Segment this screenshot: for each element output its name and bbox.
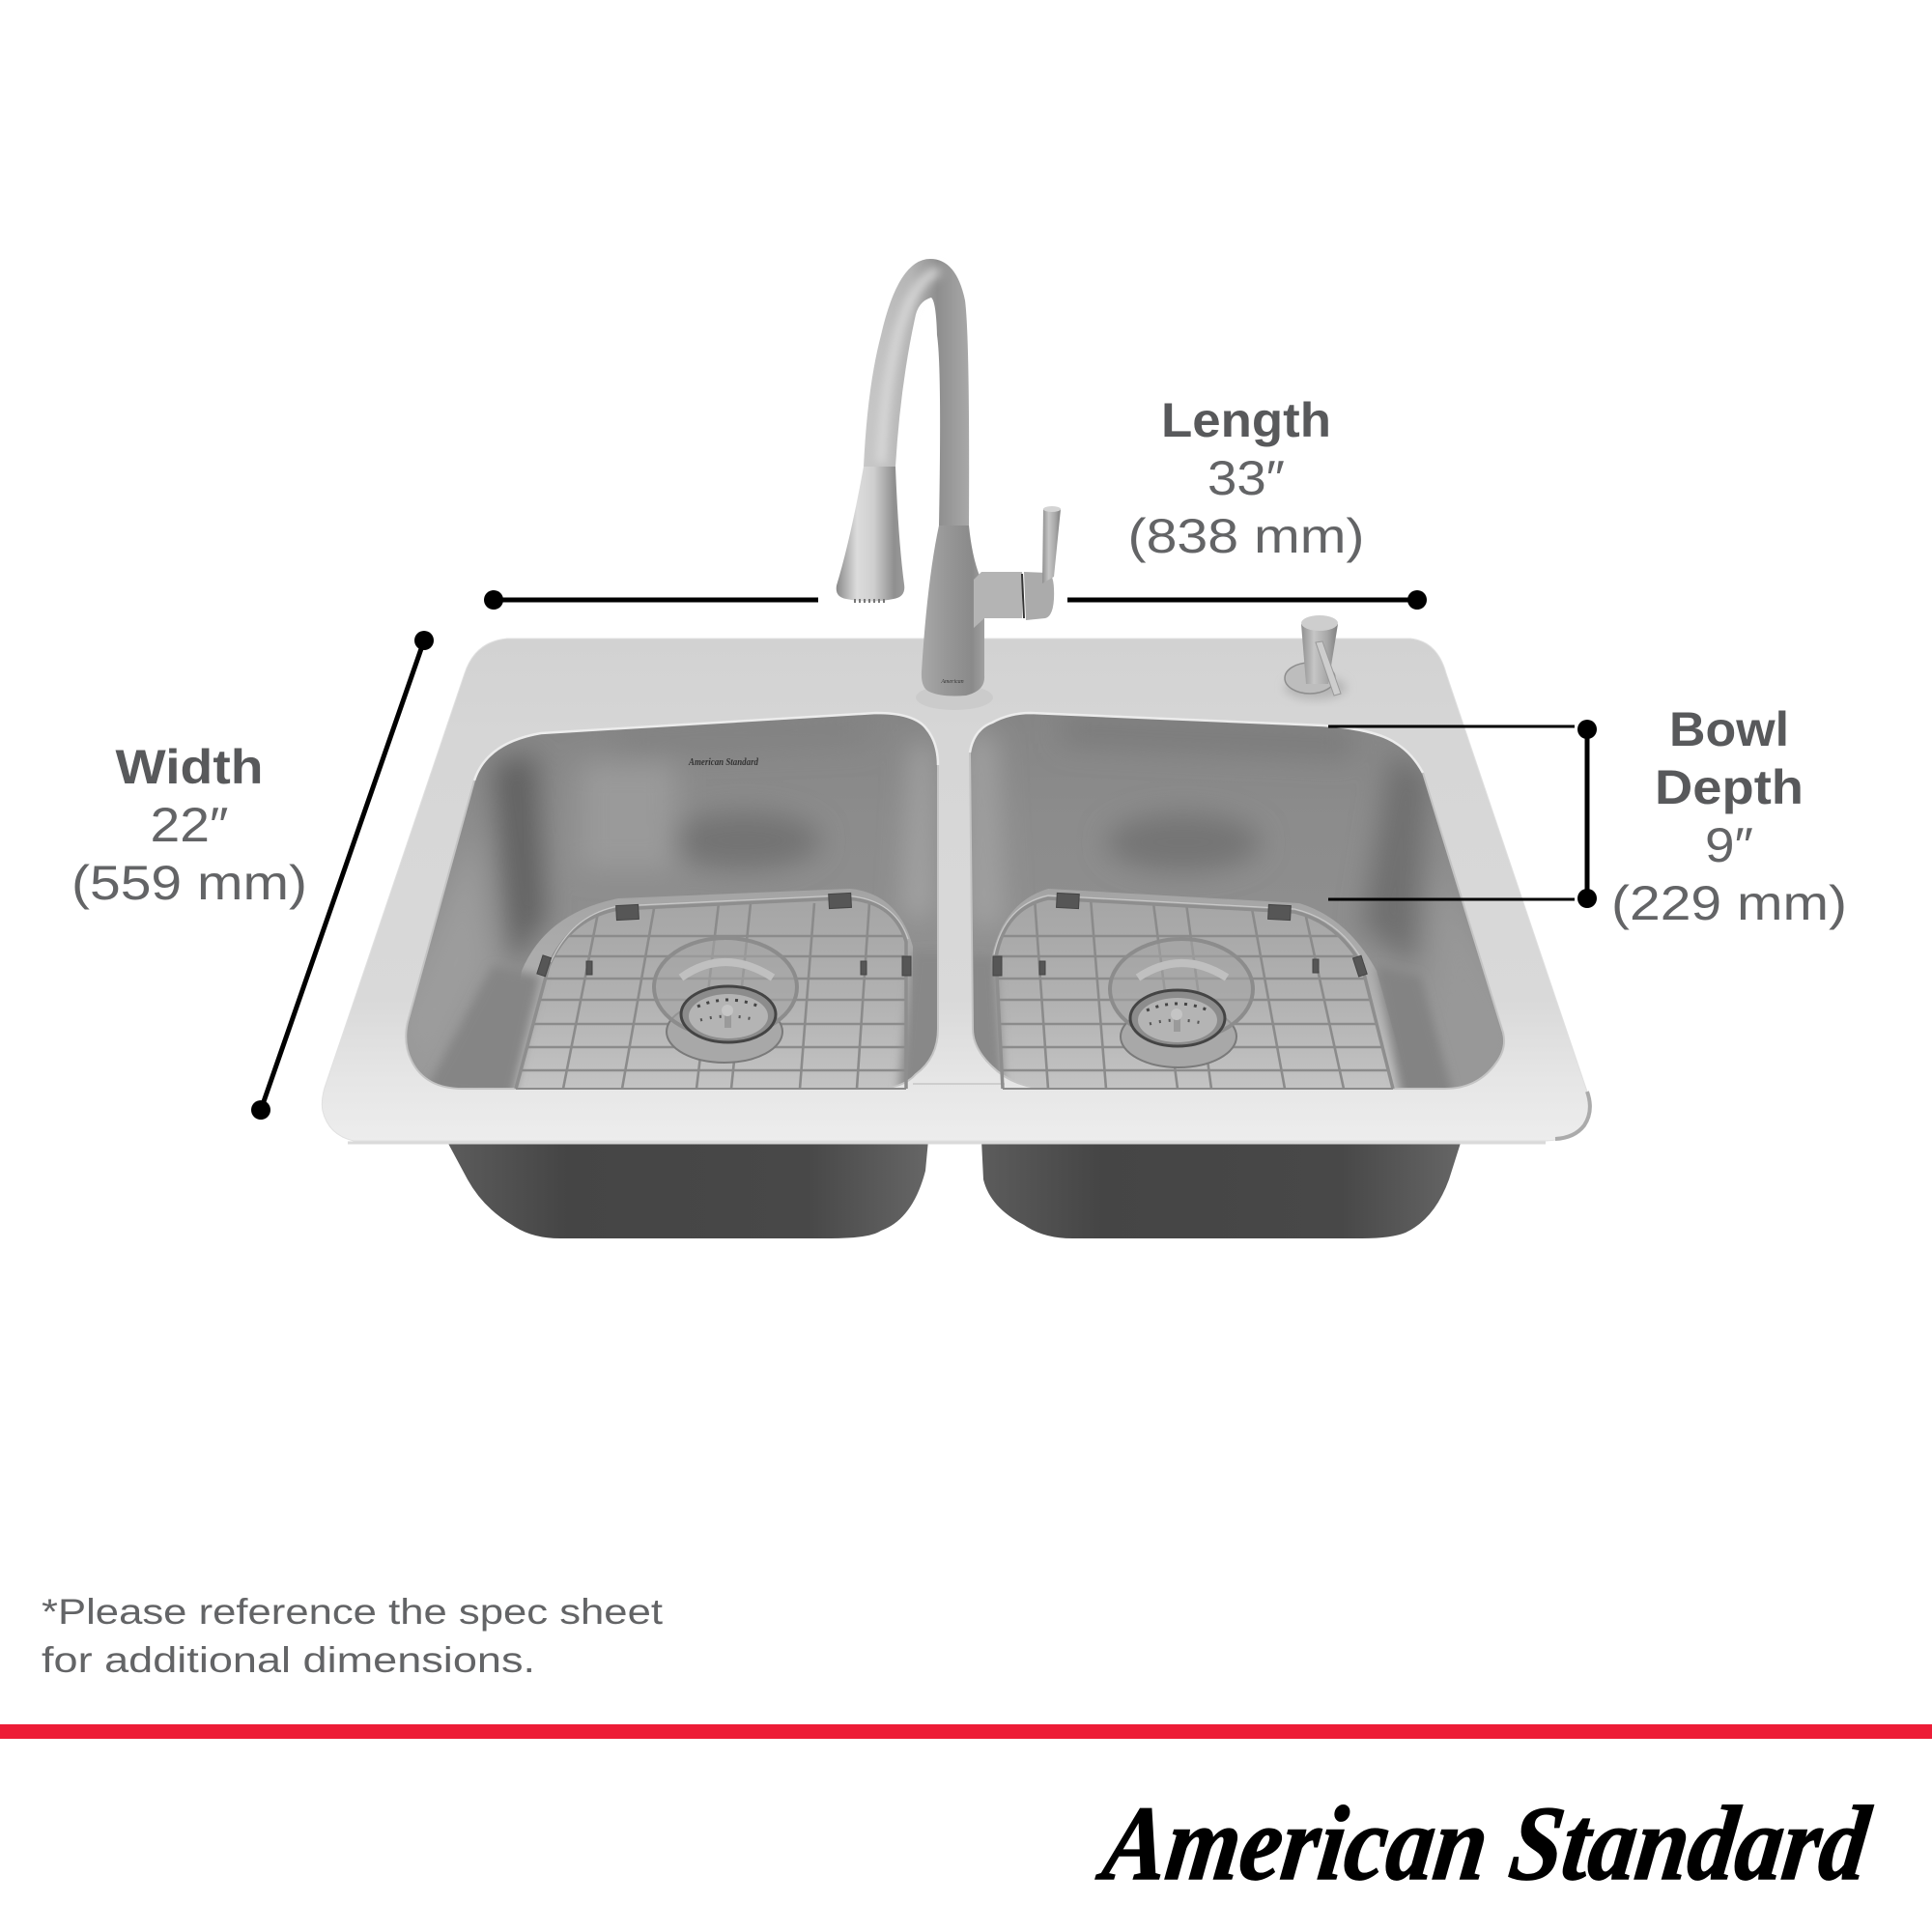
right grid clips <box>1057 893 1079 909</box>
right grid wires <box>985 898 1401 1089</box>
faucet gooseneck <box>864 259 969 526</box>
left bowl rim <box>474 713 938 781</box>
dispenser lever <box>1316 641 1341 696</box>
left grid wires <box>502 903 918 1089</box>
label: width: 22″ <box>151 798 228 852</box>
footnote: for additional dimensions. <box>42 1640 535 1680</box>
left lower basin <box>446 1140 928 1238</box>
left drain <box>681 986 776 1042</box>
red divider bar <box>0 1724 1932 1739</box>
sink deck <box>322 639 1590 1141</box>
faucet lever <box>1042 507 1061 583</box>
right strainer ring <box>1110 939 1253 1039</box>
left bowl floor <box>502 889 913 1092</box>
label: bowl depth: (229 mm) <box>1611 876 1847 930</box>
dispenser shadow <box>1285 676 1347 699</box>
right strainer flange <box>1121 1006 1236 1067</box>
right lower basin <box>981 1140 1462 1238</box>
label: width: (559 mm) <box>71 856 307 910</box>
bowl divider lower edge <box>913 1083 1005 1085</box>
faucet hub seam <box>1022 574 1024 618</box>
faucet body <box>922 526 984 696</box>
left grid frame highlight <box>551 895 908 962</box>
faucet <box>837 259 1061 710</box>
label: bowl depth: Bowl <box>1669 702 1789 756</box>
deck front edge <box>348 1142 1546 1144</box>
bowl etched logo: American Standard <box>688 756 758 768</box>
label: length: (838 mm) <box>1128 509 1364 563</box>
left strainer ring <box>654 938 797 1037</box>
deck right corner bevel <box>1555 1092 1590 1139</box>
right grid frame highlight <box>994 895 1364 963</box>
label: width <box>71 740 307 910</box>
right bowl rim <box>970 713 1423 773</box>
faucet mark: American <box>940 679 964 685</box>
left grid frame <box>516 898 906 1089</box>
right bowl bottom lip <box>970 753 1504 1089</box>
length dimension line <box>484 590 1427 610</box>
label: bowl depth: 9″ <box>1705 818 1753 872</box>
left bowl bottom lip <box>406 765 938 1089</box>
left grid <box>502 893 918 1089</box>
faucet hub cap <box>1024 572 1054 620</box>
right grid bottom wire <box>1003 1088 1393 1090</box>
right bowl <box>966 705 1517 1096</box>
label: length: 33″ <box>1208 451 1285 505</box>
faucet spray head <box>837 467 904 601</box>
width dimension line <box>251 631 434 1120</box>
right strainer band <box>1138 963 1227 978</box>
right grid frame <box>996 898 1393 1089</box>
left strainer band <box>681 962 773 978</box>
soap dispenser <box>1285 615 1347 699</box>
footnote: *Please reference the spec sheet <box>42 1592 664 1632</box>
left grid clips <box>616 904 639 921</box>
dispenser cap <box>1301 615 1338 631</box>
faucet base flange <box>916 685 993 710</box>
dispenser body <box>1301 624 1338 684</box>
label: width: Width <box>116 740 263 794</box>
faucet hub <box>974 572 1022 628</box>
right grid <box>985 893 1401 1089</box>
label: bowl depth <box>1611 702 1847 930</box>
faucet spray nozzle <box>854 599 885 603</box>
left strainer flange <box>667 1001 782 1063</box>
label: bowl depth: Depth <box>1655 760 1804 814</box>
faucet gooseneck highlight <box>881 270 939 464</box>
right bowl floor <box>985 889 1410 1092</box>
dispenser base <box>1285 663 1335 694</box>
label: length: Length <box>1161 393 1331 447</box>
sink illustration <box>322 259 1590 1238</box>
label: length <box>1128 393 1364 563</box>
left grid bottom wire <box>516 1088 906 1090</box>
right drain <box>1130 990 1225 1046</box>
bowl depth dimension line <box>1328 720 1597 908</box>
left bowl <box>396 705 952 1101</box>
footnote <box>42 1592 664 1680</box>
